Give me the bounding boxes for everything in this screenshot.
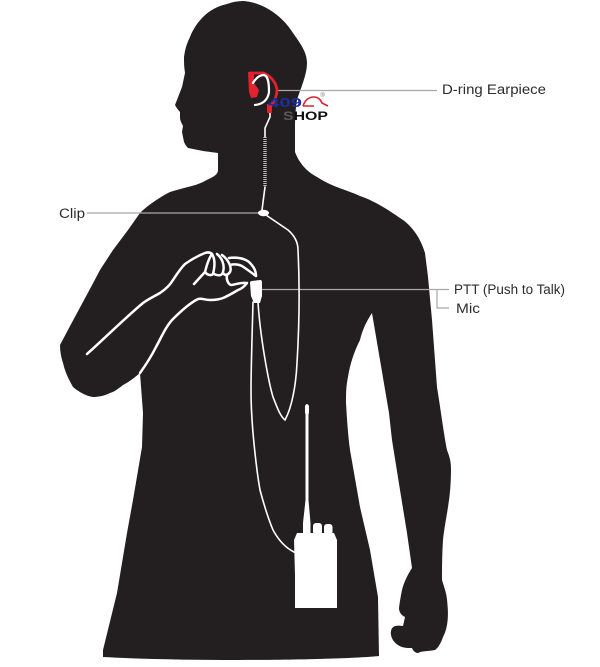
logo SHOP: SHOP bbox=[283, 109, 328, 123]
leader: D-ring Earpiece bbox=[278, 90, 437, 92]
label: Mic: Mic bbox=[456, 301, 480, 316]
logo: 409 Shop bbox=[268, 92, 328, 123]
label: D-ring Earpiece: D-ring Earpiece bbox=[442, 82, 546, 97]
thumb and lower arm line bbox=[140, 275, 247, 373]
PTT mic bbox=[250, 280, 262, 303]
cable: loop from clip to mic bbox=[258, 213, 299, 420]
logo 409: 409 bbox=[268, 95, 302, 110]
leader: Clip bbox=[87, 212, 260, 214]
hand and arm outline bbox=[87, 252, 256, 373]
logo swoosh bbox=[303, 97, 328, 106]
leader: PTT and Mic bbox=[262, 290, 449, 308]
logo registered mark: ® bbox=[320, 92, 326, 99]
label: PTT: PTT (Push to Talk) bbox=[454, 282, 565, 297]
earpiece cable bbox=[251, 107, 299, 552]
cable: upper wire bbox=[262, 107, 270, 210]
clip bbox=[258, 210, 269, 216]
label: Clip: Clip bbox=[59, 206, 85, 221]
fingers bbox=[205, 254, 256, 276]
upper arm line bbox=[87, 252, 212, 354]
leader lines bbox=[87, 90, 449, 308]
body silhouette bbox=[60, 1, 451, 660]
coil cord bbox=[263, 137, 267, 187]
icon: radio bbox=[294, 404, 337, 608]
cable: mic to radio bbox=[251, 302, 294, 552]
D-ring earpiece bbox=[248, 72, 277, 113]
